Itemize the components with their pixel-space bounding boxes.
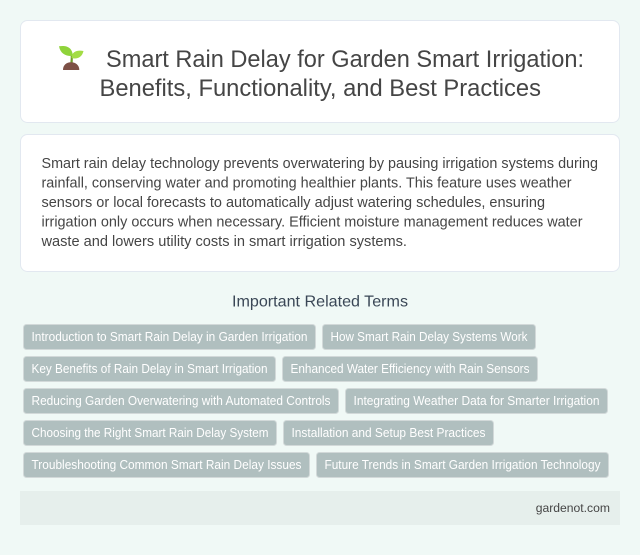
tag: how it works <box>322 324 536 350</box>
panel: title card <box>20 20 620 122</box>
title text: Benefits, Functionality, and Best Practices <box>100 75 541 102</box>
tag: future trends: Future Trends in Smart Garden Irrigation Technology <box>324 458 601 472</box>
summary paragraph: irrigation only occurs when necessary. Efficient moisture management reduces water <box>42 214 583 230</box>
panel: summary card <box>20 134 620 272</box>
title text <box>100 46 584 102</box>
tag: introduction <box>24 324 316 350</box>
tag: weather data: Integrating Weather Data for Smarter Irrigation <box>354 394 600 408</box>
summary paragraph: Smart rain delay technology prevents overwatering by pausing irrigation systems during <box>42 156 598 172</box>
footer source text: gardenot.com <box>536 501 610 515</box>
tag: troubleshooting <box>24 452 310 478</box>
icon: seedling <box>59 46 84 70</box>
tag: reducing overwatering <box>24 388 338 414</box>
tag: key benefits <box>24 356 276 382</box>
tag: key benefits: Key Benefits of Rain Delay in Smart Irrigation <box>32 362 268 376</box>
related terms tags <box>24 324 608 478</box>
tag: installation <box>284 420 494 446</box>
summary paragraph: rainfall, conserving water and promoting healthier plants. This feature uses weather <box>42 176 572 192</box>
tag: troubleshooting: Troubleshooting Common Smart Rain Delay Issues <box>32 458 302 472</box>
summary paragraph <box>41 156 598 250</box>
tag: installation: Installation and Setup Best Practices <box>292 426 486 440</box>
tag: weather data <box>346 388 608 414</box>
tag: how it works: How Smart Rain Delay Systems Work <box>330 330 528 344</box>
tag: choosing system <box>24 420 276 446</box>
heading: important related terms: Important Related Terms <box>232 294 408 310</box>
summary paragraph: sensors or local forecasts to automatically adjust watering schedules, ensuring <box>42 195 545 211</box>
tag: water efficiency <box>282 356 538 382</box>
tag: water efficiency: Enhanced Water Efficiency with Rain Sensors <box>290 362 530 376</box>
tag: future trends <box>316 452 608 478</box>
footer bar <box>20 491 620 525</box>
tag: introduction: Introduction to Smart Rain Delay in Garden Irrigation <box>32 330 308 344</box>
tag: reducing overwatering: Reducing Garden Overwatering with Automated Controls <box>32 394 330 408</box>
summary paragraph: waste and lowers utility costs in smart irrigation systems. <box>41 234 407 250</box>
title text: Smart Rain Delay for Garden Smart Irrigation: <box>106 46 584 73</box>
tag: choosing system: Choosing the Right Smart Rain Delay System <box>32 426 268 440</box>
